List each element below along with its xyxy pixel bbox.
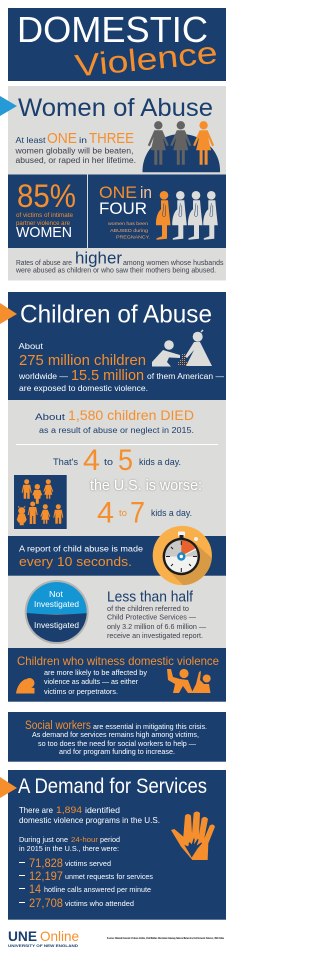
text: one in three: women globally will be beaten,: [14, 146, 134, 156]
text: rates of abuse: among women whose husbands: [123, 260, 224, 267]
panel: a demand for services: [0, 770, 226, 920]
text: 4 to 5 kids a day: to: [104, 457, 113, 467]
arrow: orange section marker: [0, 777, 17, 798]
logo: UNE Online: UNIVERSITY OF NEW ENGLAND: [8, 943, 78, 948]
list: 24-hour statistics: 71,828: [29, 858, 63, 870]
label: not investigated: Investigated: [34, 599, 79, 609]
text: rates of abuse: [15, 248, 224, 274]
text: report every 10 seconds: [19, 544, 143, 569]
arrow: blue section marker: [0, 96, 17, 116]
text: 24-hour period: 24-hour: [71, 835, 99, 844]
heading: a demand for services: A Demand for Services: [18, 775, 207, 798]
text: 1,580 children died: 1,580 children DIED: [68, 407, 194, 423]
text: social workers essential: Social workers: [25, 720, 91, 732]
list: 24-hour statistics: 12,197: [29, 871, 63, 883]
text: 4 to 5 kids a day: 5: [118, 444, 133, 477]
heading: children of abuse: Children of Abuse: [20, 300, 212, 328]
text: one in three: At least: [16, 135, 46, 145]
text: 1,894 programs: domestic violence programs in the U.S.: [19, 815, 160, 825]
text: less than half: Less than half: [107, 588, 194, 606]
list: 24-hour statistics: 14: [29, 884, 42, 896]
list: 24-hour statistics: victims served: [65, 859, 111, 868]
icon: crouching child: [16, 678, 34, 694]
text: 4 to 7 kids a day: to: [119, 508, 127, 518]
list: 24-hour statistics: victims who attended: [65, 899, 134, 908]
text: 1,894 programs: There are: [19, 805, 53, 815]
text: 275 million children: worldwide —: [18, 372, 68, 381]
label: not investigated: [34, 589, 79, 609]
text: 24-hour period: During just one: [19, 835, 68, 844]
text: 275 million children: are exposed to domestic violence.: [19, 384, 148, 393]
icon: adult and child hands: [171, 811, 215, 860]
list: 24-hour statistics: 27,708: [29, 898, 63, 910]
text: social workers essential: so too does the need for social workers to help —: [38, 741, 196, 748]
text: 4 to 7 kids a day: 4: [97, 496, 114, 530]
text: 4 to 5 kids a day: kids a day.: [139, 457, 181, 467]
heading: children who witness: Children who witness domestic violence: [17, 654, 219, 668]
text: 275 million children: 15.5 million: [71, 368, 144, 384]
stat: one in four: FOUR: [99, 200, 147, 218]
text: less than half: Child Protective Services —: [107, 612, 197, 622]
title: Violence: Violence: [73, 35, 219, 83]
title: Domestic: DOMESTIC: [17, 9, 208, 50]
panel: children of abuse: [0, 292, 226, 400]
icon: children playing with blocks: [152, 330, 212, 366]
text: rates of abuse: higher: [75, 248, 122, 268]
text: less than half: [107, 588, 207, 640]
logo: UNE Online: Online: [40, 928, 79, 944]
stat: 85 percent: WOMEN: [16, 225, 72, 241]
logo: UNE Online: [8, 928, 79, 948]
icon: adult striking a child: [167, 669, 211, 693]
stat: 85 percent: [16, 178, 76, 241]
stat: one in four: ABUSED during: [110, 228, 148, 234]
icon: three women on a navy dome: [142, 121, 220, 172]
panel: women of abuse: [0, 86, 226, 280]
icon: pregnant women: [156, 191, 218, 240]
text: 1,580 children died: [35, 407, 194, 435]
heading: women of abuse: Women of Abuse: [18, 94, 213, 122]
text: more likely to be affected: victims or perpetrators.: [44, 687, 118, 696]
text: 24-hour period: in 2015 in the U.S., there were:: [19, 844, 119, 853]
text: 1,580 children died: About: [35, 412, 65, 423]
stat: one in four: ONE: [99, 184, 137, 202]
panel: child deaths and reports: [8, 400, 226, 648]
text: one in three: [14, 131, 136, 165]
panel: navy statistics band: [8, 174, 226, 248]
text: social workers essential: As demand for services remains high among victims,: [32, 732, 199, 739]
text: one in three: in: [79, 135, 87, 145]
text: social workers essential: [25, 720, 207, 756]
panel: children who witness violence: [8, 648, 226, 702]
text: 24-hour period: period: [100, 835, 120, 844]
text: 275 million children: [18, 341, 224, 393]
text: more likely to be affected: [44, 668, 147, 696]
text: 24-hour period: [19, 835, 120, 853]
text: 4 to 7 kids a day: kids a day.: [151, 508, 192, 518]
list: 24-hour statistics: [19, 858, 153, 910]
panel: every 10 seconds band: [8, 536, 226, 576]
label: investigated: Investigated: [34, 620, 79, 630]
text: 4 to 5 kids a day: 4: [83, 444, 100, 477]
chart: not investigated vs investigated circle: [25, 580, 89, 644]
list: 24-hour statistics: hotline calls answered per minute: [44, 885, 151, 894]
text: 1,894 programs: [19, 805, 160, 825]
panel: title: [8, 8, 226, 83]
stat: one in four: women has been: [108, 221, 148, 227]
list: 24-hour statistics: unmet requests for services: [65, 872, 153, 881]
text: one in three: ONE: [47, 131, 77, 147]
text: more likely to be affected: violence as adults — as either: [44, 677, 138, 686]
stat: 85 percent: partner violence are: [16, 220, 70, 227]
stat: one in four: [99, 184, 152, 240]
text: 1,894 programs: 1,894: [56, 805, 82, 816]
text: the U.S. is worse: the U.S. is worse:: [90, 477, 202, 494]
text: report every 10 seconds: A report of child abuse is made: [19, 544, 143, 554]
text: social workers essential: and for program funding to increase.: [59, 749, 175, 756]
stat: 85 percent: 85%: [17, 178, 76, 214]
text: less than half: only 3.2 million of 6.6 million —: [107, 622, 207, 631]
text: less than half: receive an investigated report.: [107, 631, 203, 640]
text: one in three: abused, or raped in her lifetime.: [16, 156, 136, 165]
icon: stopwatch: [152, 526, 212, 586]
text: more likely to be affected: are more likely to be affected by: [44, 668, 147, 677]
text: 1,580 children died: as a result of abuse or neglect in 2015.: [39, 426, 194, 435]
label: not investigated: Not: [49, 589, 64, 599]
panel: social workers: [8, 712, 226, 762]
text: social workers essential: are essential in mitigating this crisis.: [93, 724, 207, 731]
text: 4 to 7 kids a day: [97, 496, 192, 530]
icon: family of figures: [14, 475, 67, 529]
stat: 85 percent: of victims of intimate: [16, 212, 73, 219]
text: 4 to 7 kids a day: 7: [130, 496, 145, 530]
stat: one in four: in: [140, 184, 152, 202]
text: rates of abuse: were abused as children or who saw their mothers being abused.: [15, 268, 216, 274]
text: 1,894 programs: identified: [85, 805, 120, 815]
text: less than half: of the children referred to: [107, 604, 189, 613]
arrow: orange section marker: [0, 303, 17, 324]
text: 275 million children: of them American —: [147, 372, 224, 381]
text: 4 to 5 kids a day: That's: [53, 457, 79, 467]
text: rates of abuse: Rates of abuse are: [16, 260, 72, 267]
text: 4 to 5 kids a day: [53, 444, 181, 477]
text: 275 million children: About: [18, 341, 44, 351]
text: report every 10 seconds: every 10 seconds.: [19, 554, 132, 569]
text: one in three: THREE: [89, 131, 134, 147]
text: 275 million children: 275 million children: [19, 353, 146, 369]
logo: UNE Online: UNE: [8, 928, 37, 944]
stat: one in four: PREGNANCY.: [116, 234, 150, 240]
